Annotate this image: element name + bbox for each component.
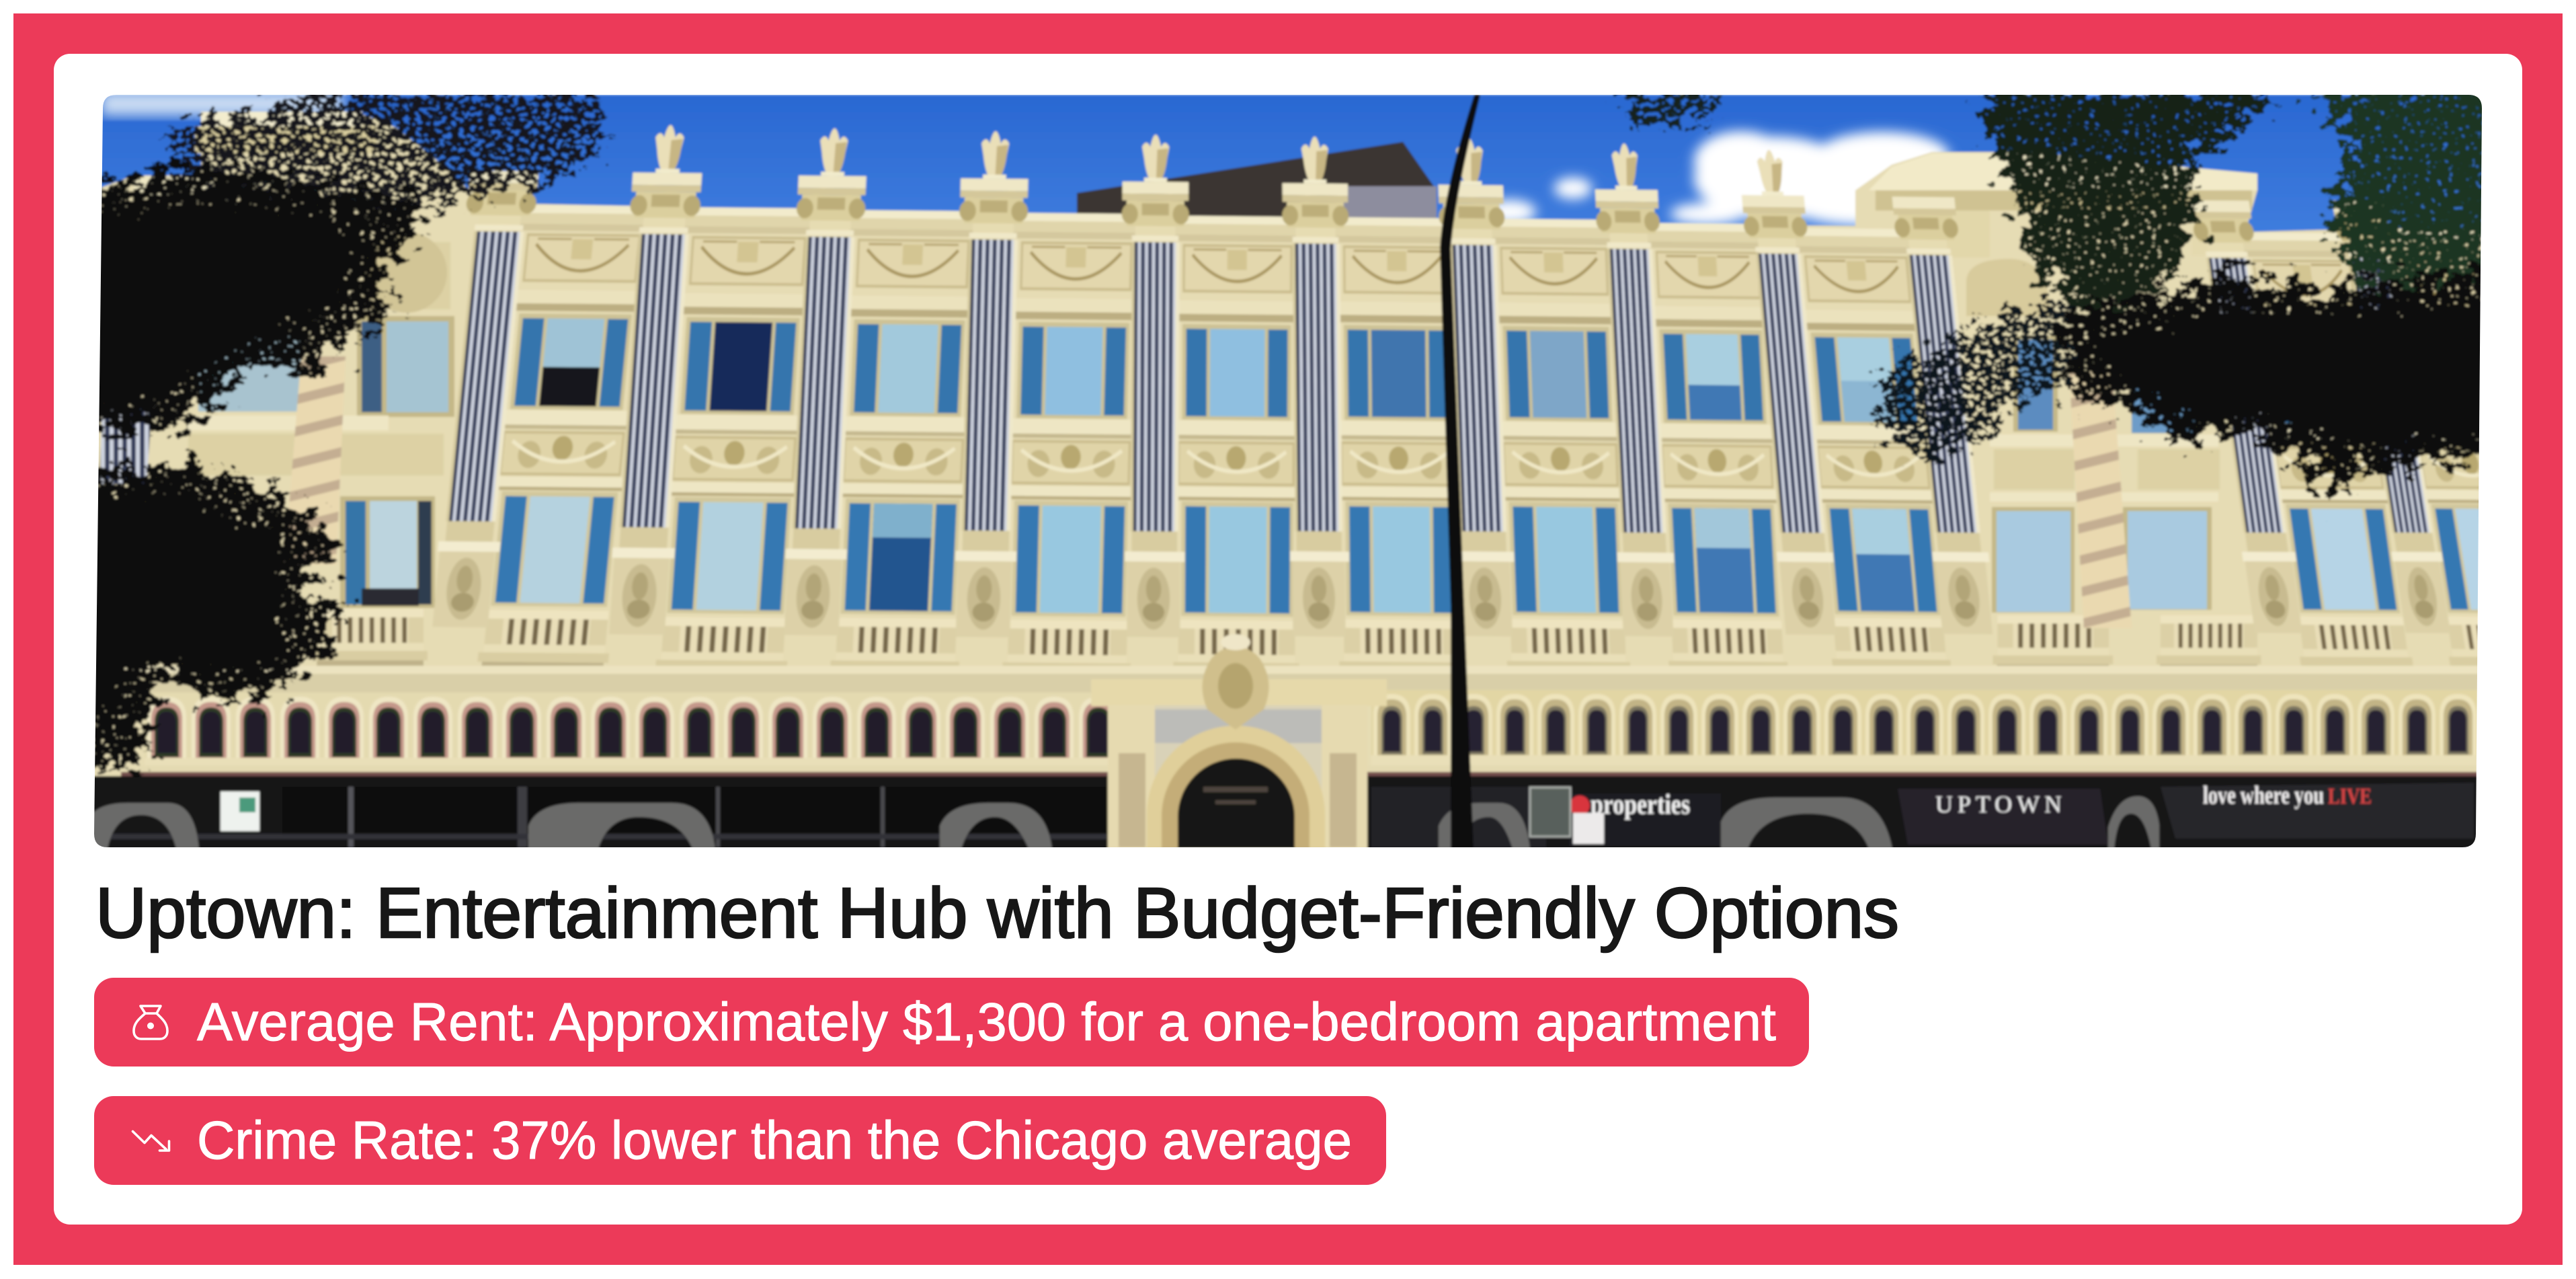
sign: love where you LIVE: love where you: [2203, 781, 2324, 810]
right twisted column: [2069, 371, 2132, 628]
arcade band: [81, 666, 2487, 777]
left tree foliage: [74, 91, 605, 773]
right pavilion windows: [1990, 334, 2261, 666]
photo: Uptown building facade: [74, 87, 2565, 850]
street lamp pole: [1440, 95, 1480, 849]
sign: properties: properties: [1591, 789, 1690, 820]
left pavilion windows: [187, 314, 456, 666]
awnings: [87, 796, 2159, 849]
sign: love where you LIVE: [2161, 781, 2474, 839]
title: Uptown: Entertainment Hub with Budget-Friendly Options: [95, 874, 1899, 953]
rear roof: [1077, 142, 1437, 227]
pill: crime rate: [94, 1096, 1386, 1185]
entrance arch: [1091, 634, 1387, 850]
facade wall: [81, 112, 2487, 780]
pale sky corner: [101, 91, 343, 116]
pill: average rent: [94, 978, 1809, 1067]
pill: average rent: Average Rent: Approximately $1,300 for a one-bedroom apartment: [197, 992, 1776, 1052]
sign: small white notice: [220, 791, 259, 831]
icon: money bag: [134, 1006, 167, 1039]
sky: [102, 95, 2482, 233]
left pavilion cornice: [134, 112, 450, 313]
sign: UPTOWN: [1898, 789, 2108, 845]
panel: infographic content: [94, 95, 2482, 1185]
sign: properties: [1569, 789, 1721, 846]
far left striped column: [99, 407, 152, 484]
far right piers and bays: [2189, 200, 2565, 712]
sign: love where you LIVE: LIVE: [2328, 784, 2372, 809]
left twisted column: [284, 356, 346, 565]
sign: UPTOWN: UPTOWN: [1935, 791, 2062, 818]
sign: street notice boards: [1530, 787, 1604, 844]
storefront base: [81, 776, 2487, 850]
pill: crime rate: Crime Rate: 37% lower than the Chicago average: [197, 1110, 1352, 1170]
right tree foliage: [1613, 87, 2494, 494]
piers and window bays: [433, 123, 1992, 666]
right pavilion cornice: [1869, 153, 2481, 316]
cloud: [1482, 131, 1949, 225]
icon: trending down arrow: [133, 1131, 169, 1151]
